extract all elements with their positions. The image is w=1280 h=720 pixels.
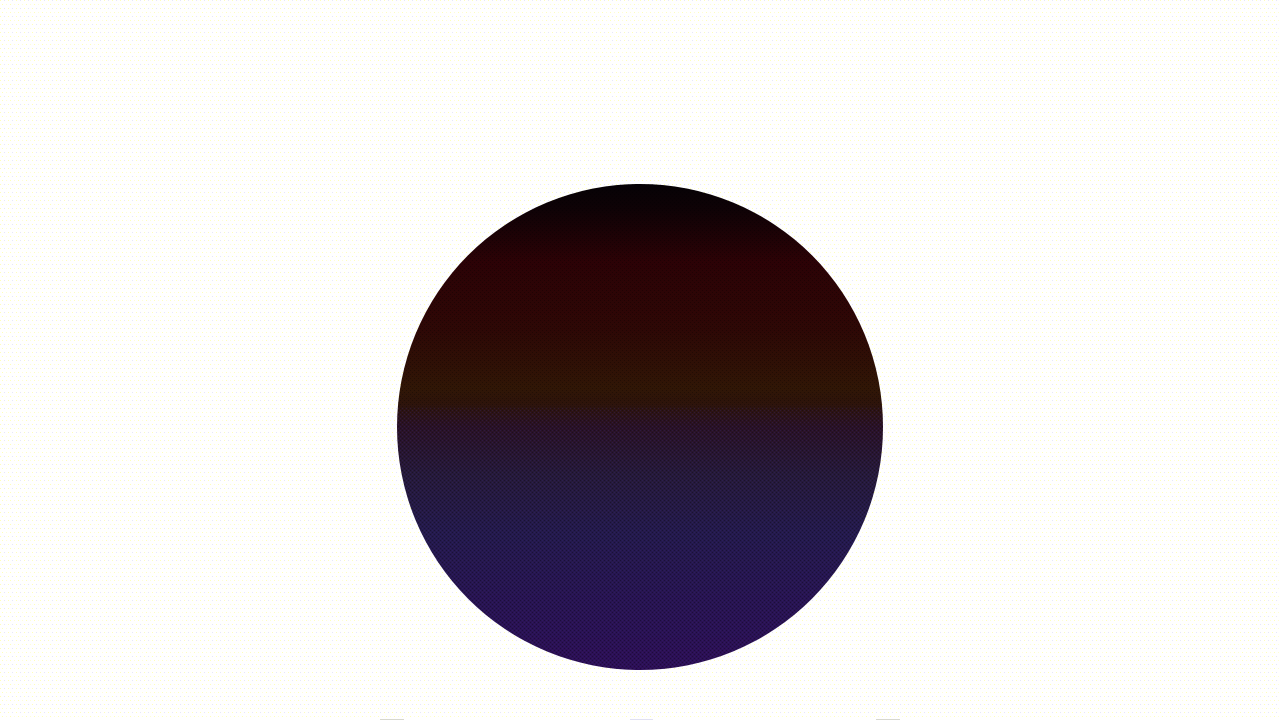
gradient circle xyxy=(397,184,883,670)
bottom edge marks xyxy=(380,719,900,720)
